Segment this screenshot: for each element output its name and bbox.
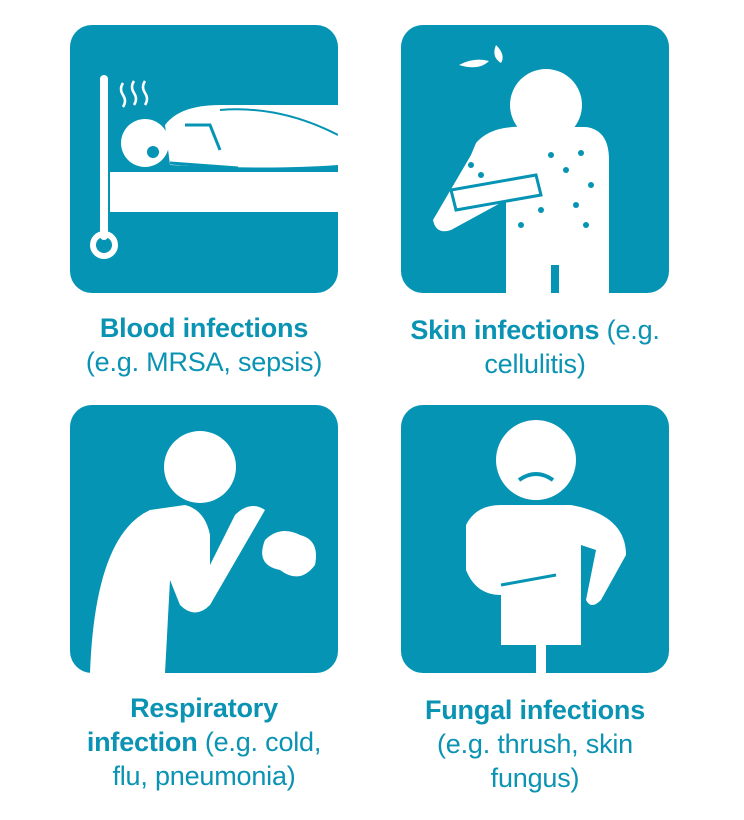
- heat waves: [121, 81, 147, 107]
- body: [433, 127, 609, 293]
- cough cloud: [262, 531, 316, 576]
- caption: fungal: (e.g. thrush, skin: [437, 729, 633, 759]
- caption: blood infections: [86, 313, 322, 377]
- head: [510, 69, 582, 141]
- panel: skin infections icon: [401, 25, 669, 293]
- body: [466, 505, 626, 673]
- bed post: [93, 75, 115, 256]
- person: [121, 105, 338, 168]
- caption: respiratory: infection (e.g. cold,: [87, 727, 321, 757]
- caption: fungal: [425, 695, 645, 793]
- caption: blood infections: (e.g. MRSA, sepsis): [86, 347, 322, 377]
- bed: [110, 172, 338, 212]
- caption: respiratory: flu, pneumonia): [112, 761, 296, 791]
- panel: fungal icon: [401, 405, 669, 673]
- caption: respiratory: Respiratory: [130, 693, 278, 723]
- caption: skin infections: [410, 315, 660, 379]
- caption: blood infections: Blood infections: [100, 313, 308, 343]
- rash dots: [468, 150, 594, 228]
- head: [164, 431, 236, 503]
- panel: blood infections icon: [70, 25, 338, 293]
- sweat drops: [459, 60, 489, 67]
- caption: skin infections: Skin infections (e.g.: [410, 315, 660, 345]
- head: [496, 420, 576, 500]
- caption: fungal: Fungal infections: [425, 695, 645, 725]
- caption: respiratory: [87, 693, 321, 791]
- caption: skin infections: cellulitis): [484, 349, 586, 379]
- caption: fungal: fungus): [491, 763, 579, 793]
- panel: respiratory icon: [70, 405, 338, 673]
- arm crossing: [451, 175, 541, 210]
- body and arm: [90, 505, 265, 673]
